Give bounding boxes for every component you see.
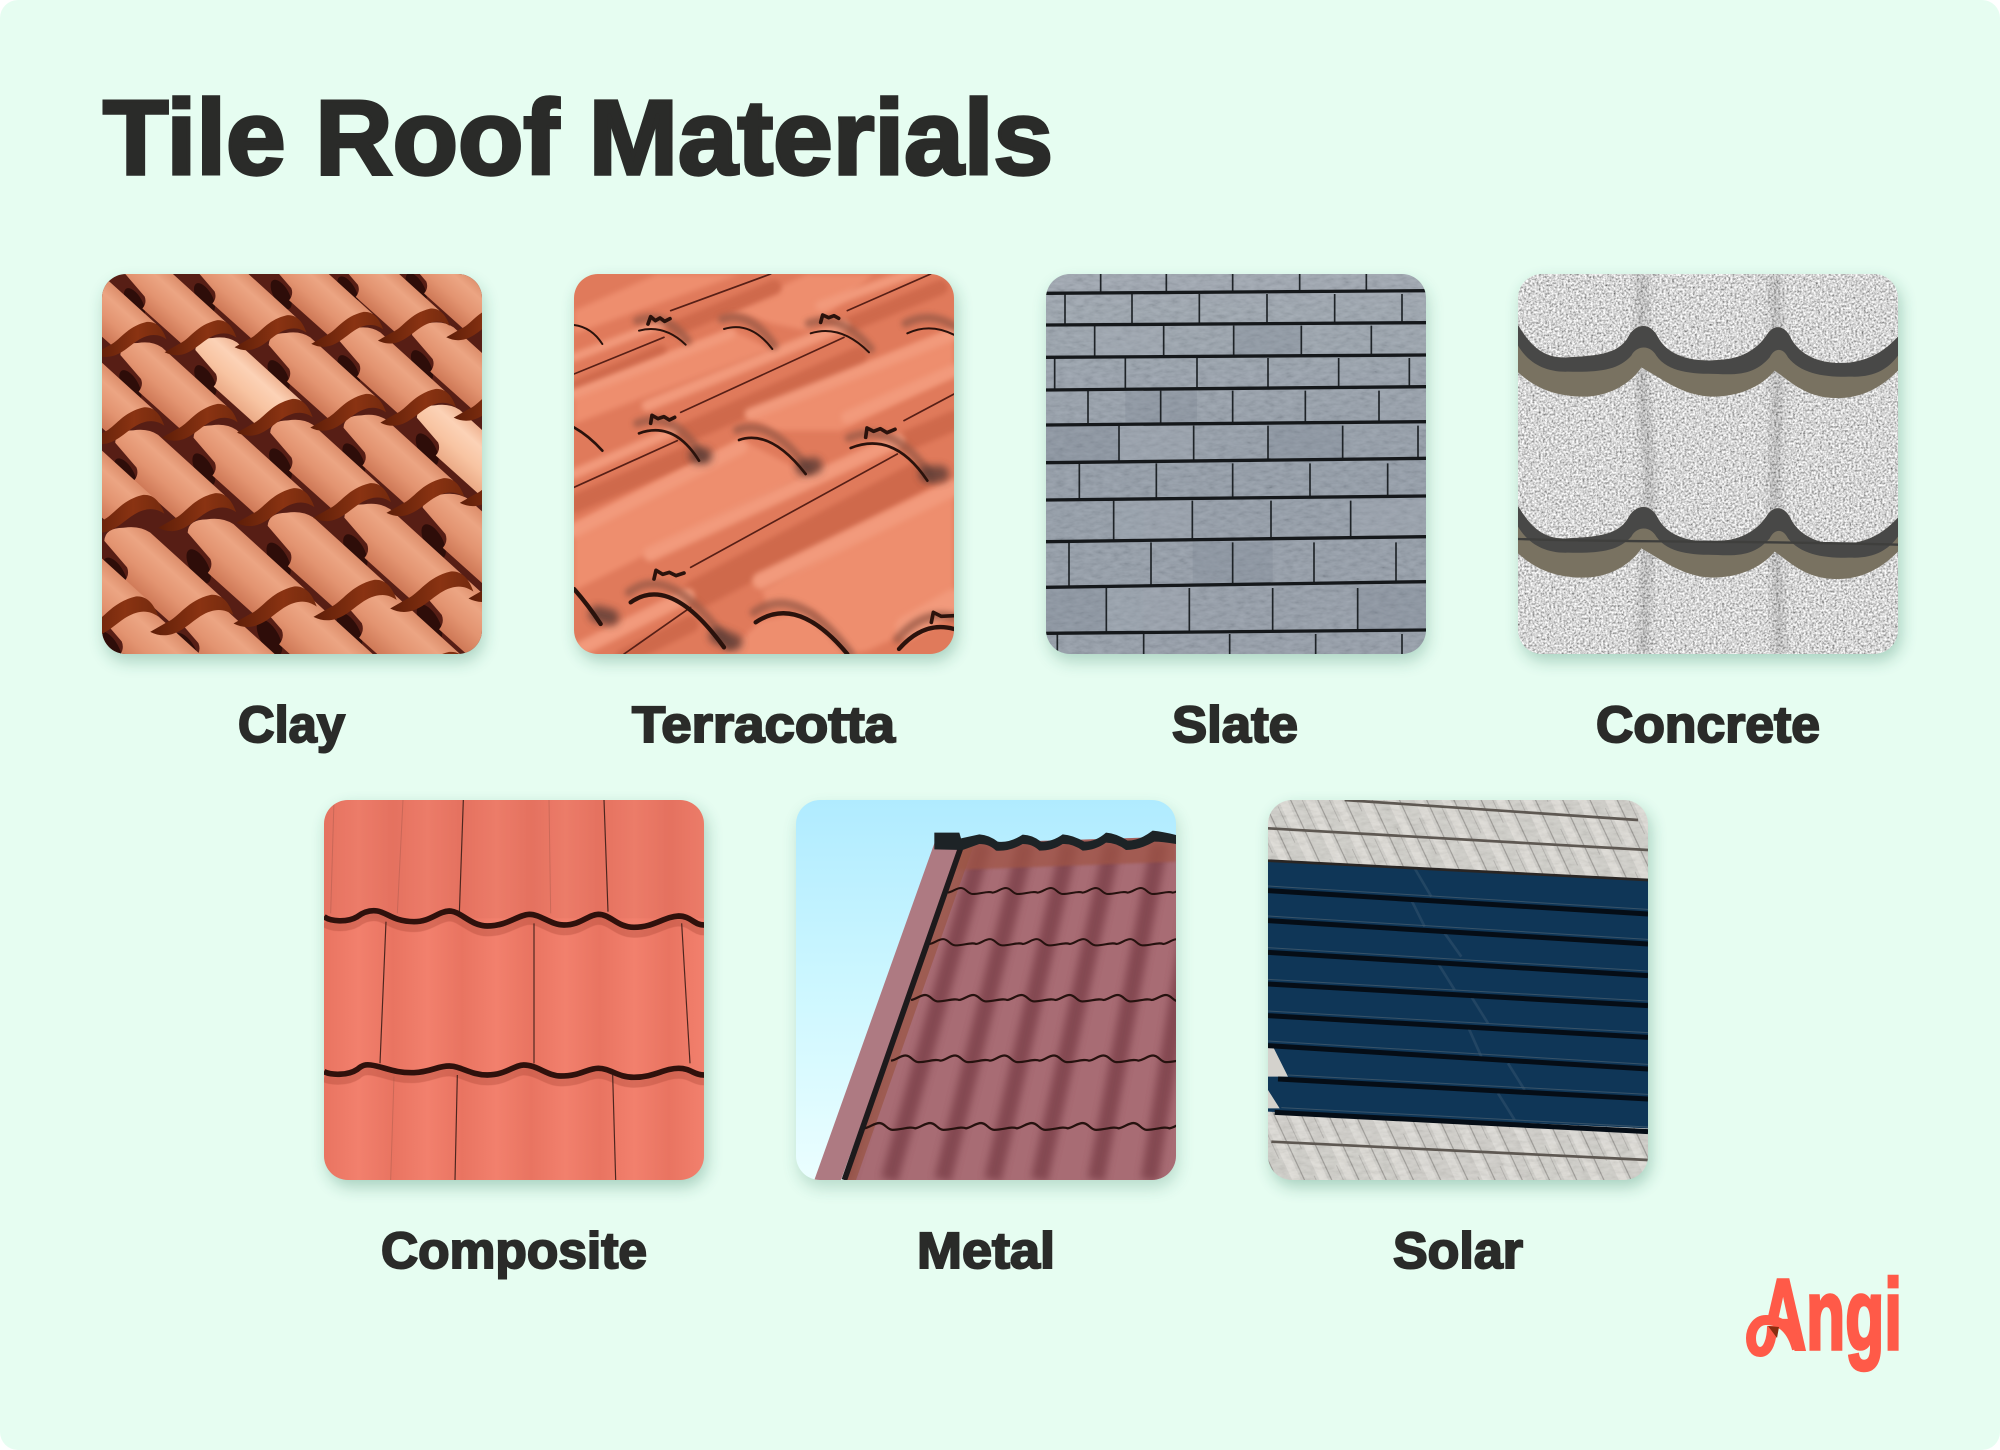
title: Tile Roof Materials bbox=[103, 79, 1053, 197]
card: concrete bbox=[1518, 274, 1901, 753]
label: terracotta: Terracotta bbox=[632, 696, 896, 753]
label: composite: Composite bbox=[381, 1222, 647, 1279]
photo: composite tiles bbox=[324, 800, 707, 1187]
photo: solar tiles bbox=[1268, 800, 1651, 1187]
photo: concrete tiles bbox=[1518, 274, 1901, 661]
logo: Angi: Angi bbox=[1760, 1259, 1902, 1371]
card: slate bbox=[1046, 274, 1428, 753]
card: composite bbox=[324, 800, 707, 1279]
logo: Angi bbox=[1750, 1259, 1902, 1371]
card: solar bbox=[1268, 800, 1651, 1279]
label: clay: Clay bbox=[238, 696, 346, 753]
label: metal: Metal bbox=[917, 1222, 1055, 1279]
card: clay bbox=[95, 273, 493, 754]
photo: metal roof bbox=[790, 800, 1186, 1196]
label: concrete: Concrete bbox=[1596, 696, 1820, 753]
label: solar: Solar bbox=[1393, 1222, 1523, 1279]
card: terracotta bbox=[571, 267, 957, 753]
photo: clay tiles bbox=[95, 273, 493, 671]
label: slate: Slate bbox=[1172, 696, 1298, 753]
photo: slate tiles bbox=[1046, 274, 1428, 662]
card: metal bbox=[790, 800, 1186, 1270]
photo: terracotta tiles bbox=[571, 267, 957, 661]
